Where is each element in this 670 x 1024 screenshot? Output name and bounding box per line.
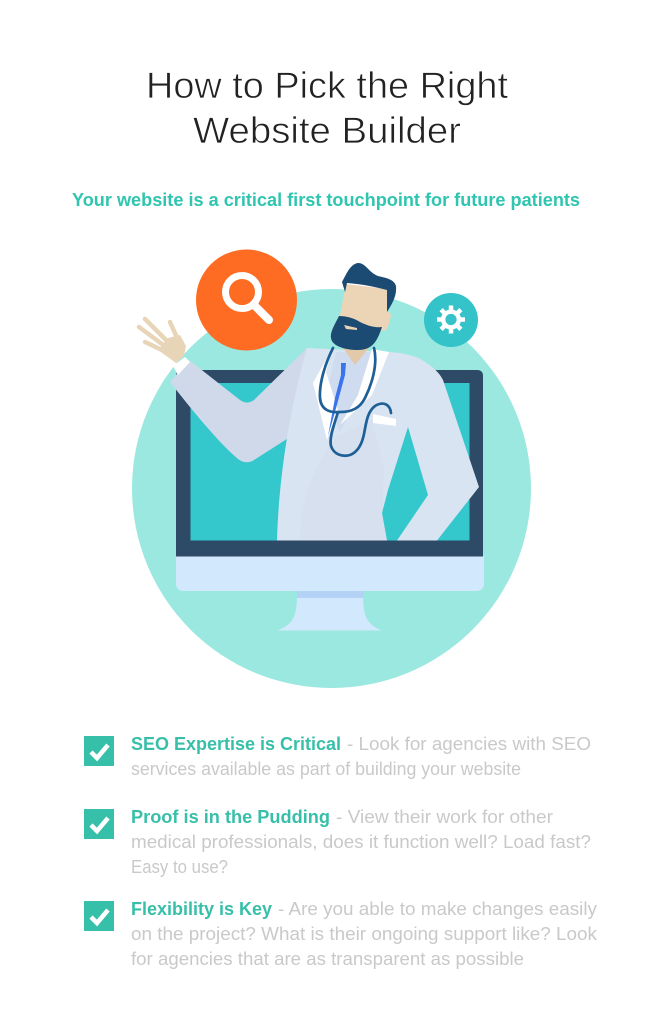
item text: - Look for agencies with SEO: [347, 734, 591, 754]
icon: magnifier: [226, 276, 269, 320]
cuff: [173, 357, 190, 375]
icon: gear: [437, 306, 465, 334]
search badge: [196, 250, 297, 350]
right lapel: [340, 349, 389, 425]
list item: flexibility: [84, 899, 598, 969]
teal circle: [424, 293, 478, 347]
doctor: [139, 263, 479, 540]
left lapel: [313, 347, 338, 440]
monitor screen: [190, 383, 470, 540]
shirt: [326, 352, 376, 432]
title: How to Pick the Right: [146, 65, 509, 106]
list item: SEO expertise: [84, 734, 591, 779]
item text: [131, 807, 591, 877]
mouth: [344, 325, 357, 330]
item text: Easy to use?: [131, 857, 228, 877]
settings badge: [424, 293, 478, 347]
pocket: [373, 414, 396, 426]
hand: [139, 319, 186, 363]
stethoscope: [320, 348, 391, 456]
tie: [328, 363, 346, 436]
icon: checkbox: [84, 736, 114, 766]
coat: [277, 348, 479, 540]
neck: [340, 344, 372, 365]
item text: Proof is in the Pudding: [131, 807, 330, 827]
item text: medical professionals, does it function well? Load fast?: [131, 832, 591, 852]
monitor chin: [176, 556, 484, 591]
illustration: doctor emerging from monitor: [132, 250, 531, 688]
monitor: [176, 370, 484, 630]
face: [339, 284, 391, 335]
item text: [131, 734, 591, 779]
icon: checkbox: [84, 809, 114, 839]
icon: checkbox: [84, 901, 114, 931]
item text: - View their work for other: [336, 807, 553, 827]
item text: SEO Expertise is Critical: [131, 734, 341, 754]
beard: [331, 316, 382, 350]
hair: [342, 263, 396, 312]
raised arm: [170, 348, 307, 462]
item text: Flexibility is Key: [131, 899, 272, 919]
item text: for agencies that are as transparent as possible: [131, 949, 524, 969]
item text: on the project? What is their ongoing support like? Look: [131, 924, 598, 944]
title: [146, 65, 509, 151]
item text: services available as part of building your website: [131, 759, 521, 779]
item text: [131, 899, 598, 969]
list item: proof: [84, 807, 591, 877]
monitor frame: [176, 370, 483, 556]
orange circle: [196, 250, 297, 350]
monitor stand: [277, 591, 382, 630]
background circle: [132, 289, 531, 688]
item text: - Are you able to make changes easily: [278, 899, 597, 919]
title: Website Builder: [193, 110, 461, 151]
coat shading: [300, 420, 387, 540]
subtitle: Your website is a critical first touchpoint for future patients: [72, 190, 580, 210]
